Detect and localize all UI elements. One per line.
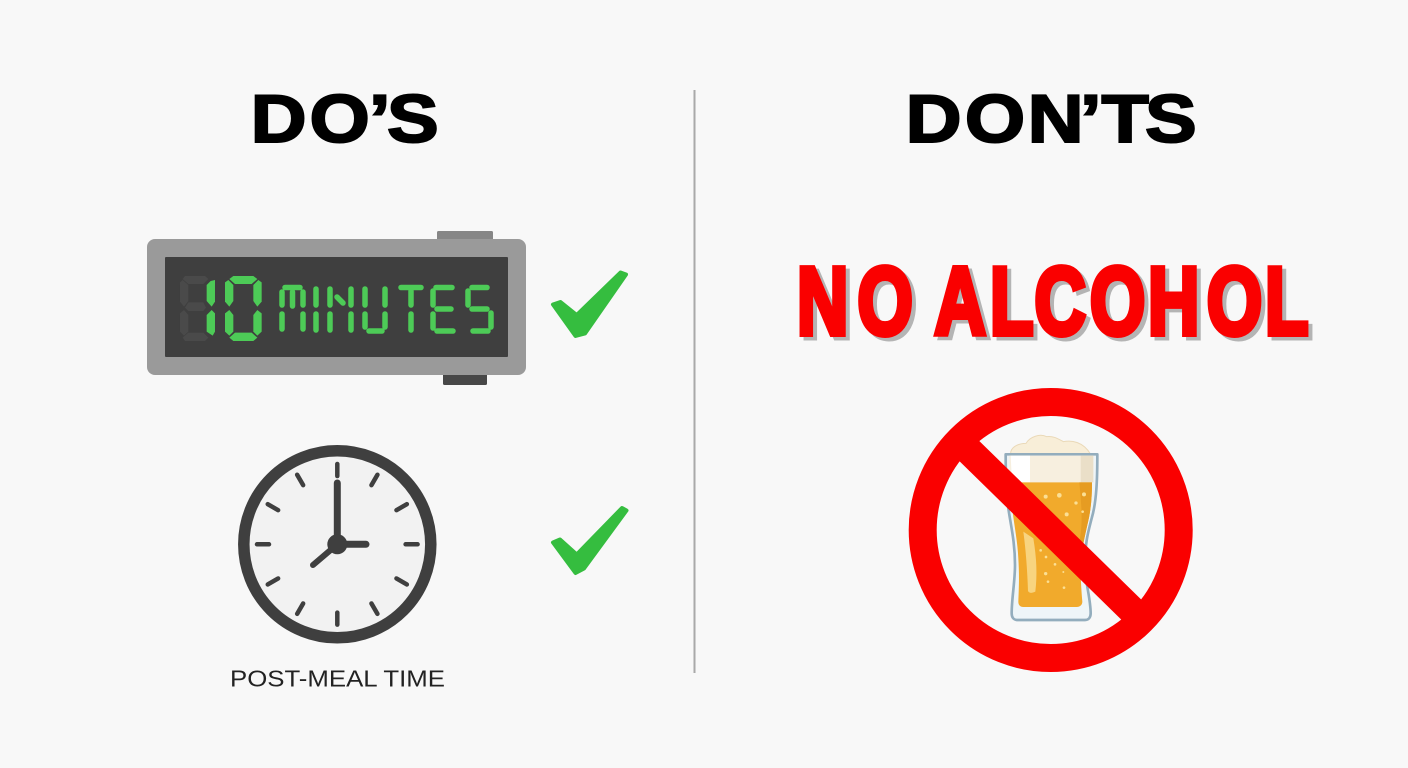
prohibition sign (923, 402, 1179, 658)
beer glass (1006, 435, 1097, 620)
timer digits: 10 (180, 276, 262, 341)
icon: beer glass crossed by prohibition sign (923, 402, 1179, 658)
icon: green check mark for clock (553, 508, 626, 573)
timer label: minutes segments (282, 288, 491, 331)
heading: do's: DO’S (251, 81, 439, 157)
warning text: no alcohol: NO ALCOHOL (797, 248, 1308, 354)
heading: don'ts: DON’TS (906, 81, 1197, 157)
icon: digital timer showing 10 minutes (147, 231, 526, 385)
label: post-meal time: POST-MEAL TIME (230, 666, 445, 692)
warning text: no alcohol: NO ALCOHOL (801, 251, 1312, 358)
icon: wall clock at post-meal time (244, 451, 431, 638)
icon: green check mark for timer (553, 272, 626, 336)
